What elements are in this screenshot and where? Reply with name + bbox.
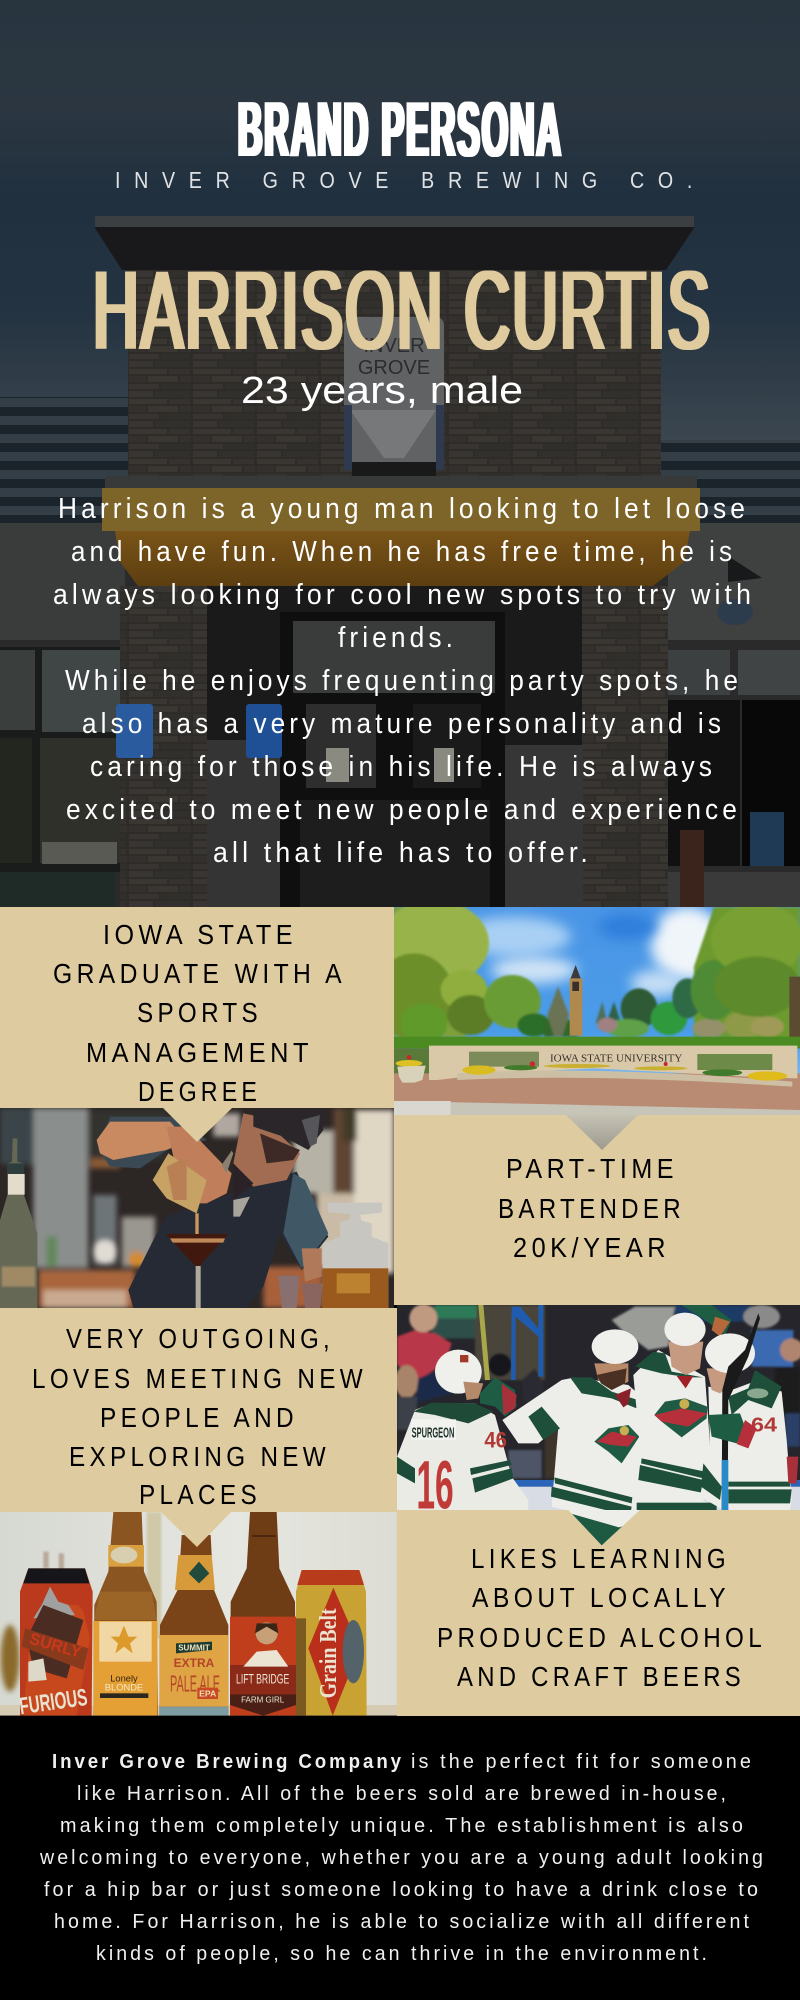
bottle: Lonely Blonde: Lonely: [110, 1674, 138, 1684]
persona description text: friends.: [338, 622, 457, 654]
bottle: Lift Bridge Farm Girl: FARM GIRL: [241, 1695, 285, 1704]
panel: personality fact: EXPLORING NEW: [69, 1441, 330, 1472]
footer panel: why Inver Grove Brewing fits: [0, 1716, 800, 2000]
can: Grain Belt: Grain Belt: [316, 1608, 342, 1698]
panel: personality fact: PEOPLE AND: [100, 1402, 298, 1433]
footer panel: why Inver Grove Brewing fits: is the perfect fit for someone: [411, 1750, 754, 1773]
footer panel: why Inver Grove Brewing fits: Inver Grove Brewing Company: [52, 1750, 404, 1773]
bottle: Summit Extra Pale Ale: PALE ALE: [170, 1671, 220, 1697]
panel: education fact: [0, 907, 394, 1108]
bottle: Lonely Blonde: [93, 1512, 158, 1716]
hero background: brewery building at dusk: GROVE: [358, 357, 430, 379]
persona description text: [53, 493, 755, 869]
panel: education fact: DEGREE: [138, 1076, 261, 1107]
panel: personality fact: [0, 1308, 397, 1512]
persona description text: Harrison is a young man looking to let loose: [58, 493, 749, 525]
arrow: tan pointer from personality panel: [161, 1512, 231, 1547]
footer panel: why Inver Grove Brewing fits: home. For Harrison, he is able to socialize with all different: [54, 1910, 752, 1933]
bottle: Summit Extra Pale Ale: EPA: [199, 1689, 217, 1699]
photo: hockey players celebrating: SPURGEON: [412, 1425, 454, 1441]
photo: Iowa State University campus: [374, 900, 800, 1115]
photo: hockey players celebrating: 64: [751, 1414, 778, 1437]
persona description text: all that life has to offer.: [213, 837, 592, 869]
subtitle: brewery name: INVER GROVE BREWING CO.: [115, 167, 706, 193]
footer panel: why Inver Grove Brewing fits: for a hip bar or just someone looking to have a drink close to: [44, 1878, 761, 1901]
bottle: Summit Extra Pale Ale: [159, 1535, 228, 1716]
panel: interests fact: ABOUT LOCALLY: [472, 1582, 730, 1613]
arrow: photo pointing down: [566, 1115, 638, 1150]
bottle: Summit Extra Pale Ale: EXTRA: [174, 1656, 215, 1670]
persona description text: While he enjoys frequenting party spots, he: [65, 665, 742, 697]
persona description text: excited to meet new people and experience: [66, 794, 741, 826]
can: Surly Furious: SURLY: [27, 1629, 84, 1662]
can: Surly Furious: [18, 1568, 93, 1720]
photo: hockey players celebrating: 16: [416, 1447, 454, 1523]
arrow: hockey photo pointing down: [568, 1510, 640, 1547]
can: Grain Belt: [296, 1570, 367, 1716]
persona description text: caring for those in his life. He is always: [90, 751, 716, 783]
footer panel: why Inver Grove Brewing fits: making them completely unique. The establishment is also: [60, 1814, 746, 1837]
bottle: Summit Extra Pale Ale: SUMMIT: [178, 1643, 210, 1652]
panel: job fact: PART-TIME: [506, 1153, 678, 1184]
panel: interests fact: AND CRAFT BEERS: [457, 1661, 745, 1692]
panel: education fact: IOWA STATE: [103, 919, 297, 950]
footer panel: why Inver Grove Brewing fits: like Harrison. All of the beers sold are brewed in-house,: [77, 1782, 729, 1805]
photo: hockey players celebrating: [395, 1304, 800, 1547]
panel: personality fact: LOVES MEETING NEW: [32, 1363, 367, 1394]
arrow: tan pointer from education panel: [163, 1108, 232, 1142]
photo: local craft beers: [0, 1512, 397, 1720]
panel: education fact: GRADUATE WITH A: [53, 958, 346, 989]
panel: interests fact: LIKES LEARNING: [471, 1543, 730, 1574]
bottle: Lift Bridge Farm Girl: LIFT BRIDGE: [236, 1670, 289, 1686]
persona description text: and have fun. When he has free time, he is: [71, 536, 736, 568]
panel: personality fact: PLACES: [139, 1479, 261, 1510]
bottle: Lift Bridge Farm Girl: [230, 1512, 296, 1716]
panel: education fact: MANAGEMENT: [86, 1037, 313, 1068]
panel: job fact: BARTENDER: [498, 1193, 685, 1224]
hero background: brewery building at dusk: [0, 0, 800, 907]
persona description text: also has a very mature personality and is: [82, 708, 725, 740]
hero panel: brewery photo with title text: [0, 0, 800, 907]
photo: bartender pouring a martini: [0, 1108, 394, 1308]
panel: job fact: 20K/YEAR: [513, 1232, 670, 1263]
persona age and gender: 23 years, male: [241, 370, 523, 412]
photo: Iowa State University campus: IOWA STATE UNIVERSITY: [550, 1052, 682, 1064]
panel: personality fact: VERY OUTGOING,: [66, 1323, 334, 1354]
bottle: Lonely Blonde: BLONDE: [105, 1682, 143, 1692]
can: Surly Furious: FURIOUS: [18, 1684, 89, 1720]
persona description text: always looking for cool new spots to try with: [53, 579, 755, 611]
panel: interests fact: [397, 1305, 800, 1716]
footer panel: why Inver Grove Brewing fits: welcoming to everyone, whether you are a young adult looking: [39, 1846, 766, 1869]
panel: job fact: [394, 1115, 800, 1305]
hero background: brewery building at dusk: INVER: [363, 335, 425, 357]
footer panel: why Inver Grove Brewing fits: kinds of people, so he can thrive in the environment.: [96, 1942, 710, 1965]
panel: education fact: SPORTS: [137, 997, 262, 1028]
photo: hockey players celebrating: 46: [484, 1427, 507, 1452]
